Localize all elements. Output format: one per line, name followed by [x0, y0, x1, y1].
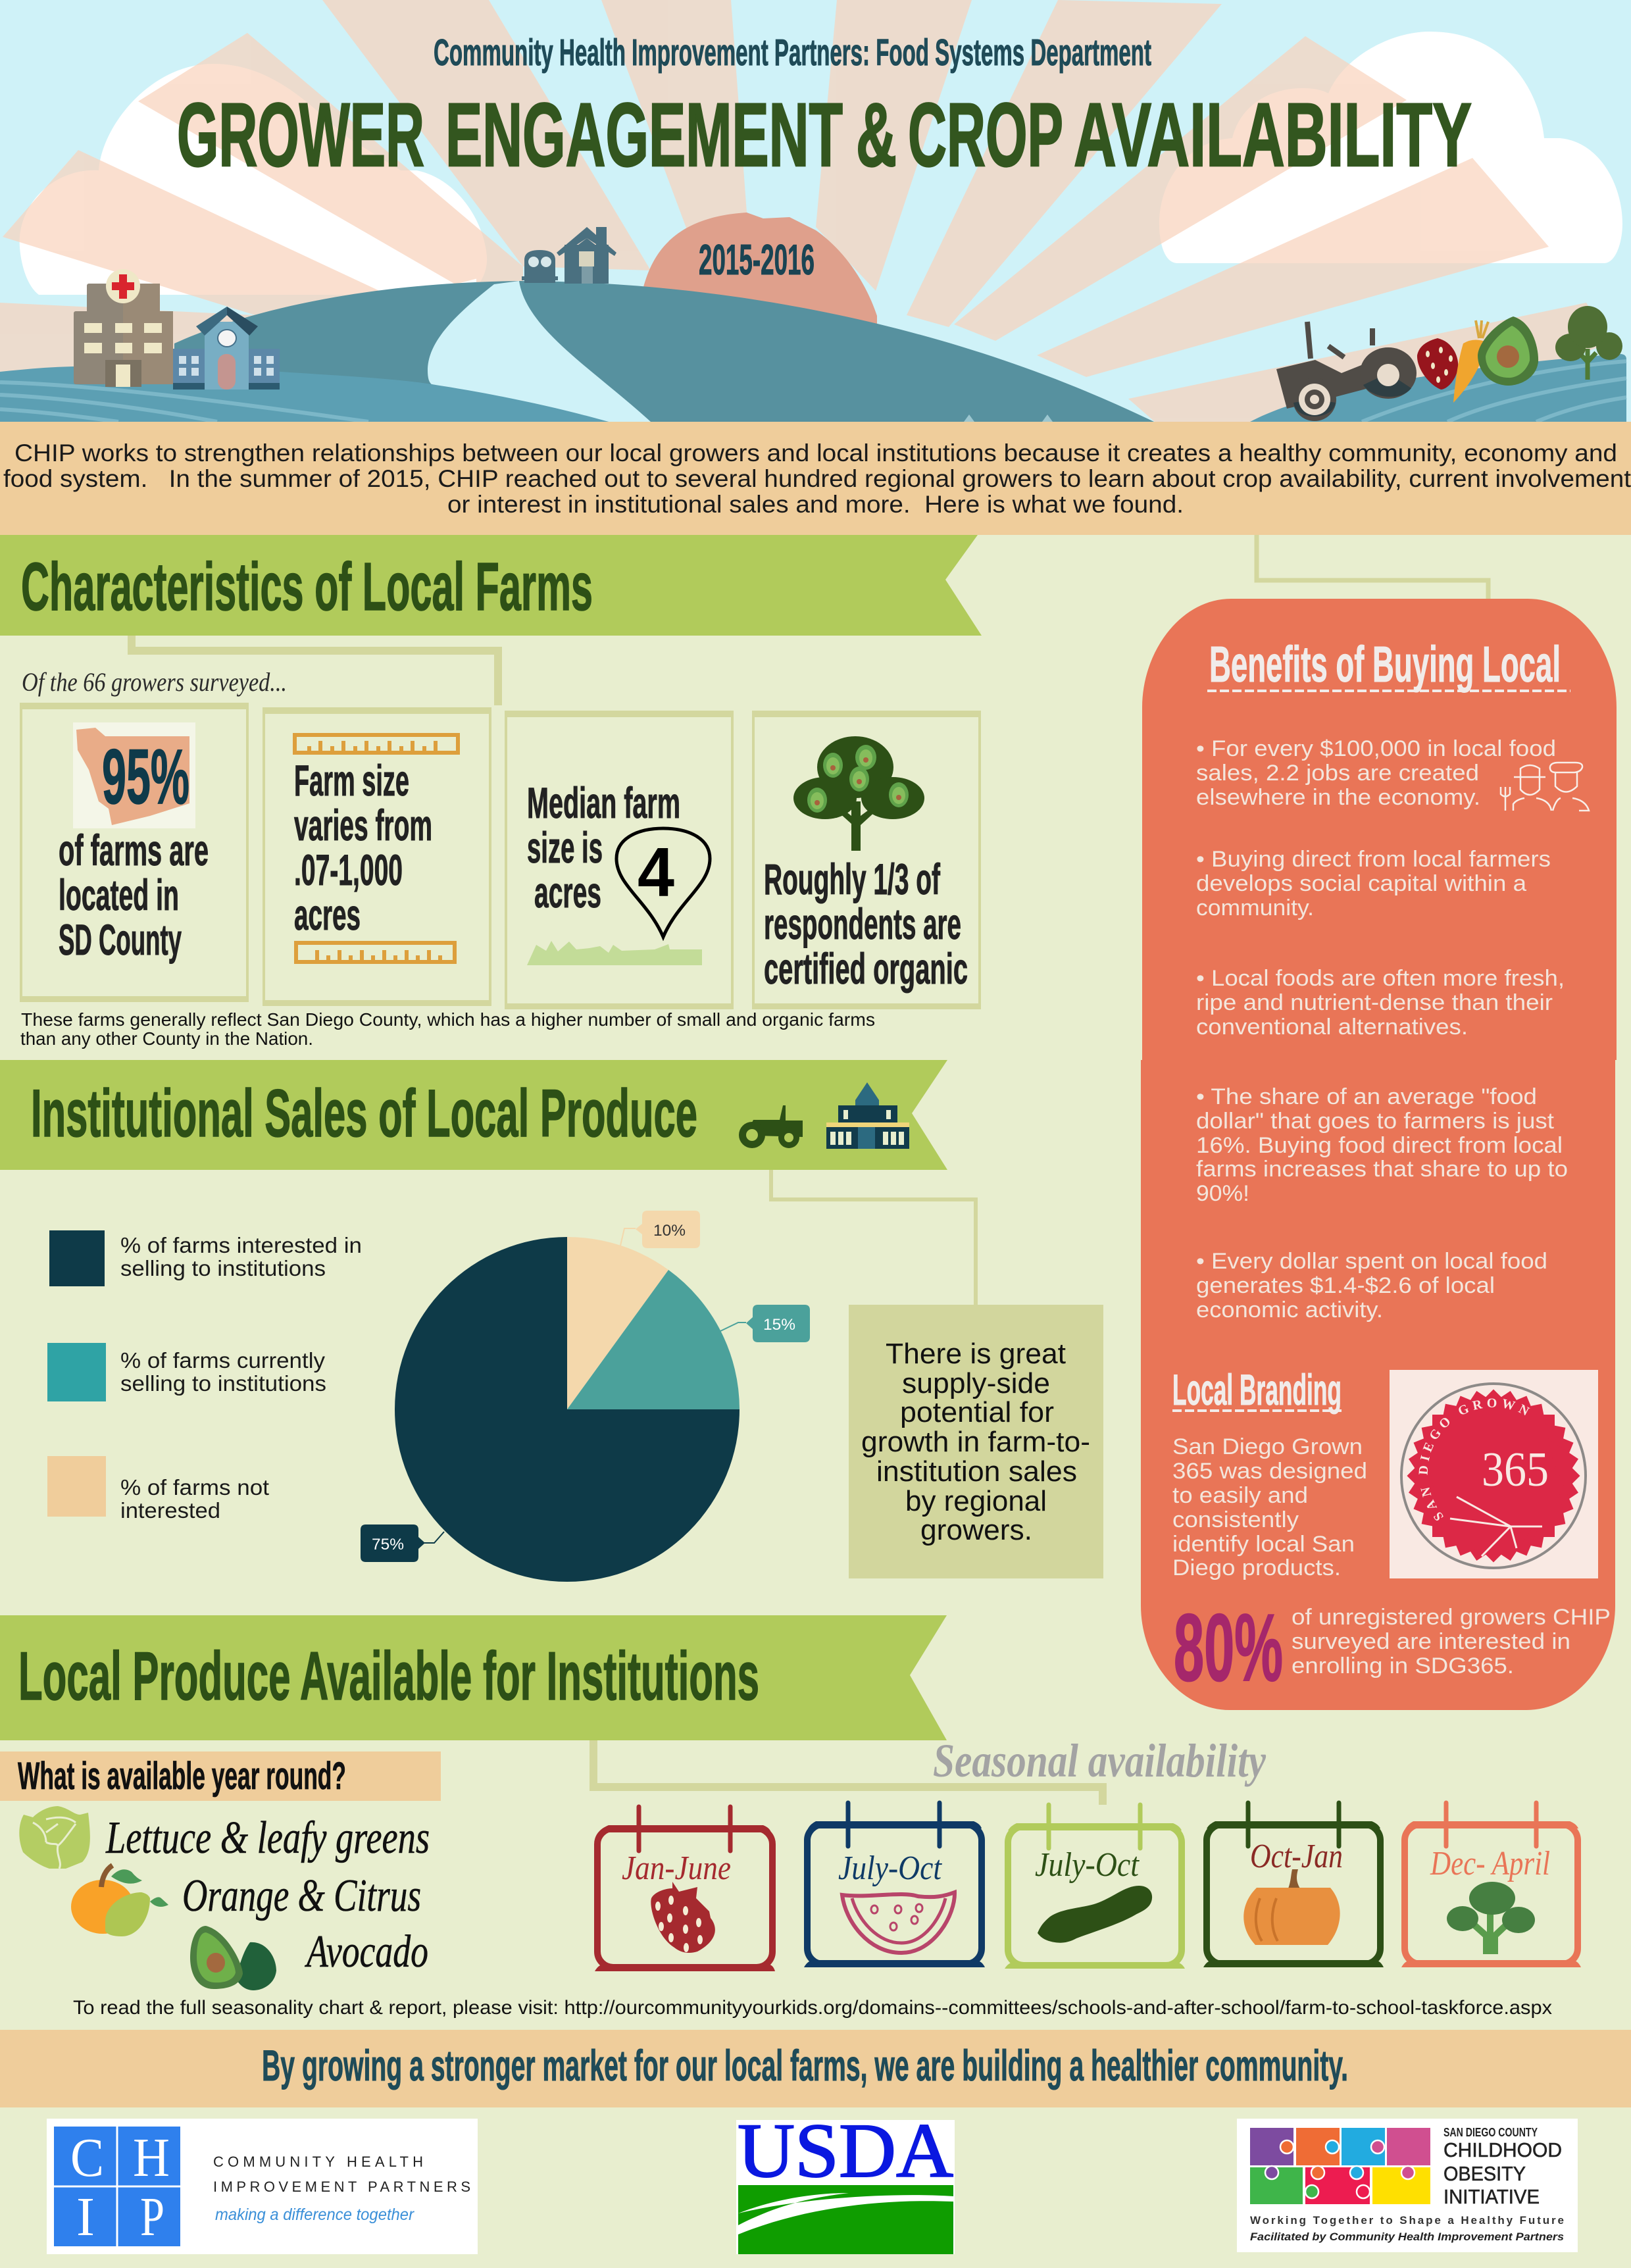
- logo: Childhood Obesity Initiative: CHILDHOOD: [1443, 2138, 1562, 2161]
- left field stripes: [0, 382, 368, 422]
- benefit bullets: • Buying direct from local farmers: [1196, 847, 1551, 872]
- card: farm size: varies from: [294, 801, 432, 849]
- footnote: than any other County in the Nation.: [20, 1028, 313, 1049]
- grass: [527, 941, 702, 965]
- calendar: July-Oct watermelon: July-Oct: [838, 1850, 942, 1887]
- right field: [1250, 354, 1626, 422]
- logo: San Diego Grown 365: 365: [1482, 1443, 1549, 1497]
- logo: Childhood Obesity Initiative: Facilitated by Community Health Improvement Partners: [1250, 2230, 1564, 2243]
- year label: 2015-2016: [699, 236, 815, 284]
- benefit bullets: elsewhere in the economy.: [1196, 785, 1480, 810]
- calendar: Jan-June strawberry: Jan-June: [622, 1850, 731, 1887]
- year round: lettuce: [19, 1806, 430, 1869]
- logo: CHIP: IMPROVEMENT PARTNERS: [213, 2179, 470, 2195]
- card: 95% in SD County: SD County: [59, 915, 182, 964]
- year round: avocado: [190, 1926, 428, 1990]
- sun: [643, 213, 877, 342]
- benefit bullets: farms increases that share to up to: [1196, 1157, 1568, 1182]
- card: 95% in SD County: 95%: [102, 734, 189, 820]
- map pin: [616, 828, 710, 937]
- label: 15%: 15%: [763, 1316, 795, 1334]
- icon: strawberry: [651, 1882, 715, 1953]
- logo: Childhood Obesity Initiative: Working Together to Shape a Healthy Future: [1250, 2214, 1564, 2227]
- callout: supply-side potential: growth in farm-to-: [861, 1426, 1090, 1458]
- hospital: [74, 269, 173, 387]
- benefit bullets: develops social capital within a: [1196, 871, 1526, 896]
- callout: supply-side potential: potential for: [900, 1396, 1054, 1428]
- house and car: [522, 227, 616, 284]
- tractor: [1276, 322, 1417, 421]
- year round: orange: [71, 1865, 421, 1936]
- benefit bullets: dollar" that goes to farmers is just: [1196, 1109, 1555, 1134]
- label: 10%: [620, 1211, 700, 1248]
- seasonal availability heading: Seasonal availability: [933, 1734, 1267, 1787]
- connector to benefits panel: [1257, 535, 1488, 600]
- benefit bullets: generates $1.4-$2.6 of local: [1196, 1273, 1495, 1298]
- header illustration: [0, 0, 1631, 422]
- benefit bullets: [1196, 736, 1568, 1323]
- footnote: These farms generally reflect San Diego County, which has a higher number of small and organic farms: [21, 1009, 875, 1030]
- banner: institutional sales: [0, 1060, 947, 1170]
- card: 95% in SD County: located in: [59, 870, 179, 919]
- benefit bullets: ripe and nutrient-dense than their: [1196, 990, 1553, 1015]
- benefit bullets: community.: [1196, 895, 1314, 920]
- intro band: food system. In the summer of 2015, CHIP reached out to several hundred regional growers to learn about crop availability, current involvement: [3, 465, 1631, 492]
- callout: supply-side potential: by regional: [905, 1485, 1047, 1517]
- avocado: [1478, 316, 1538, 386]
- icon: watermelon: [842, 1892, 955, 1953]
- calendar: Dec-April broccoli: Dec- April: [1430, 1845, 1550, 1882]
- card: certified organic: [752, 711, 981, 1009]
- card: farm size: .07-1,000: [294, 845, 403, 894]
- carrot: [1453, 320, 1488, 403]
- county map: [73, 722, 195, 828]
- card: 95% in SD County: [20, 703, 249, 1002]
- title: GROWER: [177, 85, 424, 186]
- card: median farm size: acres: [534, 868, 601, 917]
- local branding text: San Diego Grown: [1172, 1434, 1363, 1459]
- logo: CHIP: C: [70, 2127, 104, 2188]
- calendar: Jan-June strawberry: [595, 1807, 775, 1971]
- local branding text: identify local San: [1172, 1532, 1355, 1557]
- 80% statistic: 80%: [1174, 1594, 1283, 1701]
- icon: tractor: [739, 1105, 803, 1148]
- benefit bullets: 16%. Buying food direct from local: [1196, 1133, 1563, 1158]
- intro band: [0, 422, 1631, 535]
- legend: % of farms not: [120, 1475, 269, 1499]
- benefit bullets: economic activity.: [1196, 1298, 1383, 1323]
- logo: CHIP: I: [76, 2186, 95, 2248]
- logo: Childhood Obesity Initiative: INITIATIVE: [1443, 2185, 1540, 2208]
- icon: farmer and chef: [1501, 763, 1589, 811]
- card: farm size: acres: [294, 890, 361, 939]
- 80% statistic: of unregistered growers CHIP: [1292, 1605, 1611, 1630]
- card: certified organic: certified organic: [764, 944, 968, 993]
- banner: local produce: [0, 1615, 947, 1740]
- icon: broccoli: [1447, 1882, 1535, 1954]
- year round: lettuce: Lettuce & leafy greens: [105, 1813, 430, 1863]
- label: 75%: [361, 1525, 444, 1562]
- callout: supply-side potential: There is great: [886, 1338, 1066, 1370]
- logo: Childhood Obesity Initiative: SAN DIEGO COUNTY: [1443, 2126, 1538, 2139]
- acreage number: 4: [638, 834, 674, 911]
- icon: institution building: [826, 1082, 909, 1149]
- connector to cards: [132, 636, 498, 705]
- logo: CHIP: H: [133, 2127, 170, 2188]
- panel: benefits of buying local: [1141, 599, 1617, 1710]
- benefit bullets: • Every dollar spent on local food: [1196, 1249, 1547, 1274]
- 80% statistic: enrolling in SDG365.: [1292, 1653, 1514, 1678]
- logo: San Diego Grown 365: [1390, 1370, 1598, 1578]
- survey note: Of the 66 growers surveyed...: [22, 667, 287, 697]
- label: 75%: 75%: [372, 1536, 404, 1553]
- footnote: [20, 1009, 875, 1049]
- logo: San Diego Grown 365: SAN DIEGO GROWN: [1418, 1399, 1530, 1521]
- benefit bullets: • The share of an average "food: [1196, 1084, 1537, 1109]
- road: [428, 281, 651, 422]
- local branding text: Diego products.: [1172, 1555, 1341, 1580]
- year round: avocado: Avocado: [305, 1927, 428, 1977]
- logo: USDA: [736, 2107, 955, 2254]
- year round heading: [0, 1751, 441, 1801]
- calendar: July-Oct watermelon: [804, 1803, 985, 1967]
- logo: CHIP: P: [140, 2186, 164, 2248]
- benefit bullets: • Local foods are often more fresh,: [1196, 966, 1565, 991]
- benefit bullets: • For every $100,000 in local food: [1196, 736, 1556, 761]
- calendar: July-Oct cucumber: [1005, 1805, 1185, 1969]
- title: [177, 85, 1472, 186]
- title: &: [856, 85, 897, 186]
- banner: local produce: Local Produce Available for Institutions: [18, 1638, 759, 1715]
- hill peaks: [964, 415, 1053, 422]
- local branding text: consistently: [1172, 1507, 1299, 1532]
- title: ENGAGEMENT: [445, 85, 843, 186]
- callout: supply-side potential: growers.: [920, 1514, 1032, 1546]
- card: median farm size: Median farm: [527, 778, 680, 827]
- banner: institutional sales: Institutional Sales of Local Produce: [31, 1076, 697, 1151]
- pie chart: [395, 1237, 740, 1582]
- logo: USDA: USDA: [738, 2107, 953, 2194]
- right field stripes: [1362, 361, 1626, 422]
- connector to callout: [771, 1170, 976, 1305]
- school: [173, 307, 280, 390]
- calendar: July-Oct cucumber: July-Oct: [1035, 1846, 1140, 1884]
- legend: % of farms currently: [120, 1348, 326, 1373]
- legend: % of farms interested in: [120, 1233, 362, 1257]
- connector to calendars: [593, 1740, 1103, 1805]
- clouds: [20, 32, 1622, 295]
- local branding text: to easily and: [1172, 1483, 1308, 1508]
- local branding text: [1172, 1434, 1367, 1580]
- calendar: Oct-Jan pumpkin: [1203, 1803, 1384, 1967]
- 80% statistic: surveyed are interested in: [1292, 1629, 1570, 1654]
- benefit bullets: sales, 2.2 jobs are created: [1196, 761, 1479, 786]
- ruler: [295, 735, 458, 753]
- tree: [1555, 306, 1622, 380]
- benefit bullets: conventional alternatives.: [1196, 1015, 1468, 1040]
- card: certified organic: respondents are: [764, 899, 961, 948]
- benefit bullets: 90%!: [1196, 1181, 1249, 1206]
- card: certified organic: Roughly 1/3 of: [764, 855, 941, 903]
- callout: supply-side potential: institution sales: [876, 1455, 1077, 1488]
- card: median farm size: [505, 711, 734, 1009]
- legend: selling to institutions: [120, 1371, 326, 1396]
- year round: orange: Orange & Citrus: [182, 1871, 421, 1921]
- logo: Childhood Obesity Initiative: OBESITY: [1443, 2162, 1526, 2185]
- logo: CHIP: making a difference together: [215, 2205, 415, 2224]
- ruler: [296, 943, 455, 962]
- legend: selling to institutions: [120, 1256, 326, 1280]
- intro band: or interest in institutional sales and more. Here is what we found.: [447, 491, 1184, 518]
- left field: [0, 365, 609, 422]
- legend: interested: [120, 1498, 220, 1523]
- avocado tree: [793, 736, 924, 851]
- legend: [47, 1230, 362, 1523]
- logo: CHIP: [47, 2119, 478, 2254]
- title: CROP: [908, 85, 1063, 186]
- label: 15%: [720, 1305, 810, 1342]
- local branding heading: Local Branding: [1172, 1365, 1342, 1414]
- callout: supply-side potential: [849, 1305, 1103, 1578]
- local branding text: 365 was designed: [1172, 1459, 1367, 1484]
- logo: Childhood Obesity Initiative: [1237, 2119, 1578, 2252]
- logo: CHIP: COMMUNITY HEALTH: [213, 2154, 423, 2170]
- year round heading: What is available year round?: [18, 1755, 346, 1798]
- sun rays: [0, 0, 1612, 422]
- puzzle: [1250, 2128, 1430, 2204]
- icon: cucumber: [1038, 1886, 1152, 1943]
- strawberry: [1417, 338, 1458, 390]
- intro band: CHIP works to strengthen relationships between our local growers and local institutions because it creates a healthy community, economy and: [14, 440, 1617, 466]
- banner: characteristics: Characteristics of Local Farms: [21, 549, 593, 624]
- calendar: Dec-April broccoli: [1401, 1803, 1581, 1967]
- card: farm size: Farm size: [294, 756, 409, 805]
- card: farm size: [263, 707, 491, 1006]
- central hill: [174, 281, 1154, 422]
- 80% statistic: [1174, 1594, 1611, 1701]
- callout: supply-side potential: supply-side: [902, 1367, 1050, 1399]
- calendar: Oct-Jan pumpkin: Oct-Jan: [1250, 1838, 1343, 1875]
- report link: To read the full seasonality chart & report, please visit: http://ourcommunityyourkids.org/domains--committees/schools-and-after-school/farm-to-school-taskforce.aspx: [73, 1997, 1552, 2019]
- closing band: [0, 2030, 1631, 2107]
- label: 10%: 10%: [653, 1222, 686, 1240]
- icon: pumpkin: [1243, 1869, 1340, 1945]
- card: median farm size: size is: [527, 823, 603, 872]
- card: 95% in SD County: of farms are: [59, 826, 209, 874]
